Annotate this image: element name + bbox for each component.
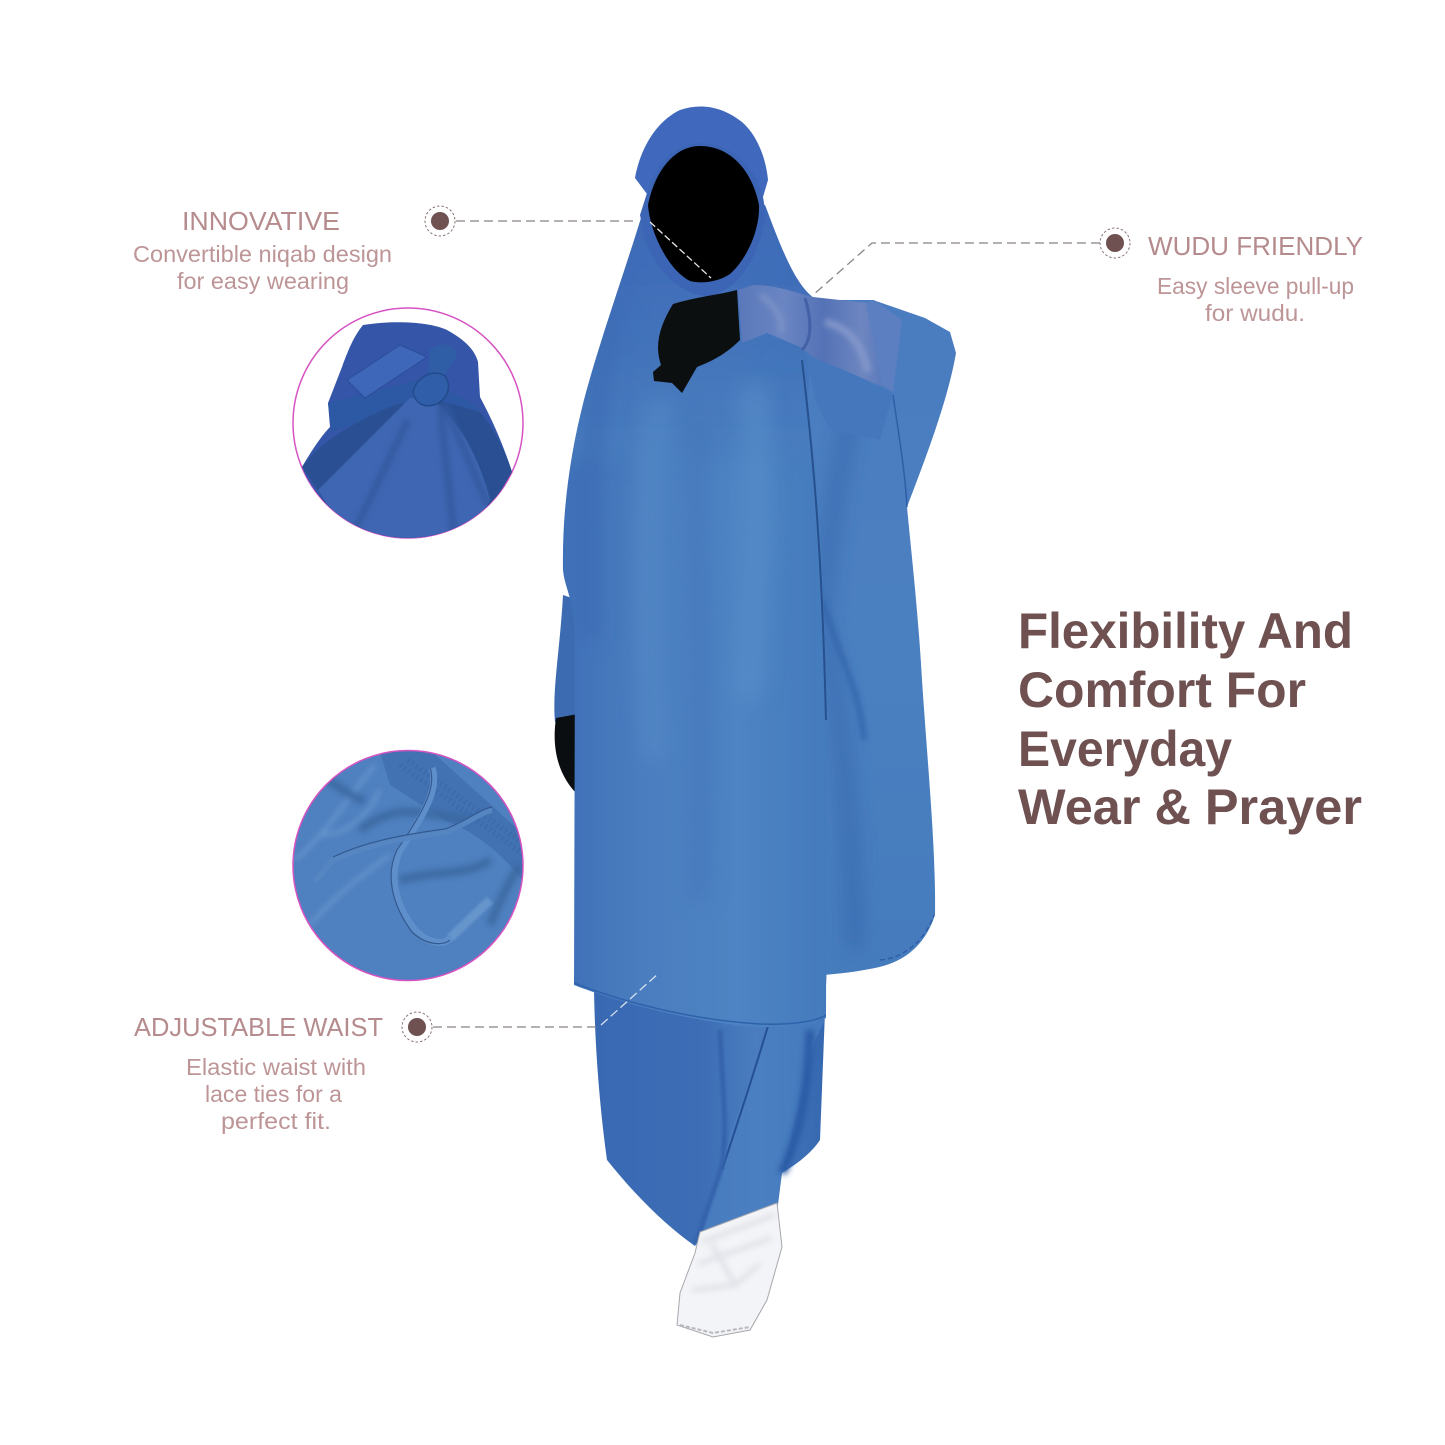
circle inset: elastic waist with ties <box>293 750 530 980</box>
headline: Flexibility And <box>1018 603 1353 659</box>
leader line <box>813 243 1100 295</box>
callout: innovative: for easy wearing <box>177 268 349 294</box>
main tunic and hijab <box>550 190 830 1027</box>
leader line <box>433 1026 597 1028</box>
callout: innovative: Convertible niqab design <box>133 241 392 267</box>
callout: adjustable waist: perfect fit. <box>221 1108 331 1134</box>
back cape panel <box>790 300 956 975</box>
cape lining under the raised sleeve <box>806 352 893 440</box>
callout: adjustable waist: Elastic waist with <box>186 1054 366 1080</box>
white sneaker <box>677 1203 782 1337</box>
callout: wudu friendly: Easy sleeve pull-up <box>1157 273 1354 299</box>
flap <box>347 345 427 398</box>
leader line <box>456 220 636 222</box>
callout: adjustable waist <box>134 973 659 1134</box>
trousers <box>594 960 827 1246</box>
black gloved hand <box>653 290 740 393</box>
callout: innovative <box>133 206 711 294</box>
satin sleeve pulled up <box>738 285 902 392</box>
callout marker <box>1100 228 1130 258</box>
callout: adjustable waist: ADJUSTABLE WAIST <box>134 1012 383 1042</box>
headline: Comfort For <box>1018 662 1306 718</box>
callout: wudu friendly: for wudu. <box>1205 300 1305 326</box>
circle inset: niqab knot <box>293 308 523 560</box>
black face opening <box>648 146 759 282</box>
callout marker <box>425 206 455 236</box>
callout: wudu friendly: WUDU FRIENDLY <box>1148 231 1363 261</box>
callout: wudu friendly <box>813 228 1363 326</box>
headline <box>1018 603 1362 835</box>
hood cap <box>635 106 768 197</box>
knot <box>428 345 457 375</box>
left glove <box>555 714 581 797</box>
callout marker <box>402 1012 432 1042</box>
headline: Wear & Prayer <box>1018 779 1362 835</box>
knot band <box>328 388 386 431</box>
model figure wearing blue jilbab <box>550 106 956 1337</box>
callout: innovative: INNOVATIVE <box>182 206 340 236</box>
left sleeve <box>554 595 578 725</box>
headline: Everyday <box>1018 721 1232 777</box>
callout: adjustable waist: lace ties for a <box>205 1081 343 1107</box>
hood underlay around the face <box>640 135 766 296</box>
